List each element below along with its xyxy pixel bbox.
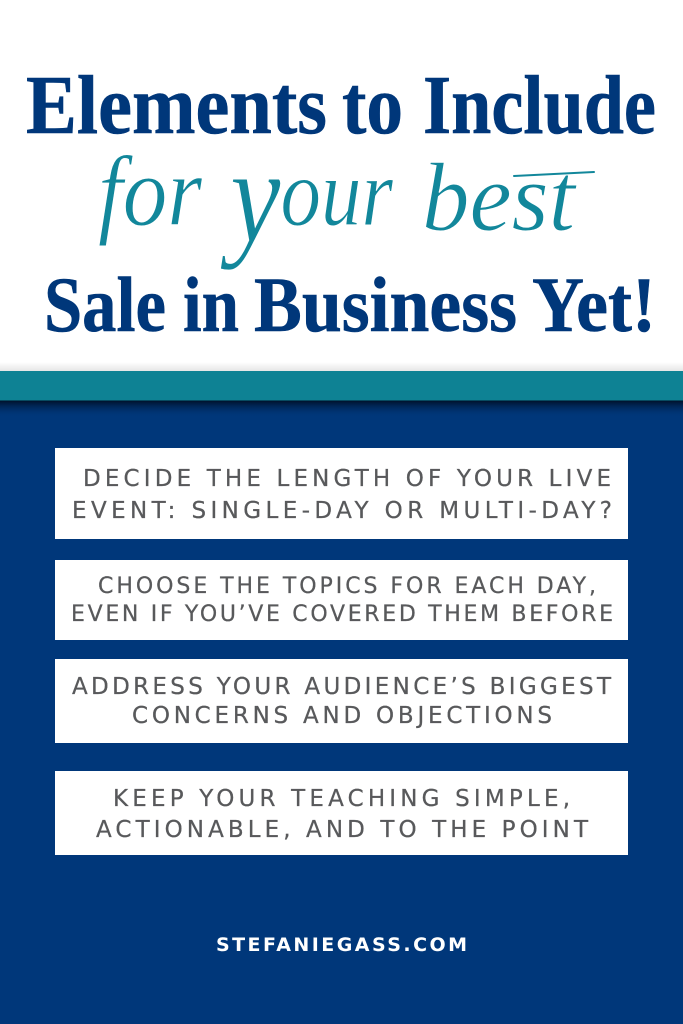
heading: script subtitle: best [422,144,578,252]
panel: white header background [0,0,683,372]
heading: first title line: to [342,59,403,152]
panel: item 4 [55,771,628,855]
heading: last title line: in [183,261,239,348]
panel: item 3 [55,659,628,743]
heading: first title line [26,59,656,152]
panel: item 2 [55,560,628,640]
heading: last title line [44,261,656,348]
panel: item 1 [55,448,628,539]
panel: item 1: EVENT: SINGLE-DAY OR MULTI-DAY? [72,498,612,524]
heading: script subtitle: our [281,139,394,246]
heading: first title line: Elements [26,59,327,152]
footer website: STEFANIEGASS.COM [216,934,467,956]
heading: script subtitle [98,122,594,271]
panel: item 3: ADDRESS YOUR AUDIENCE’S BIGGEST [72,674,612,700]
heading: script subtitle: y [220,122,281,271]
heading: script subtitle: for [98,136,203,247]
panel: item 4: KEEP YOUR TEACHING SIMPLE, [113,786,570,812]
heading: last title line: Sale [44,261,166,348]
panel: navy background [0,400,683,1024]
teal divider band [0,362,683,418]
panel: item 2: EVEN IF YOU’VE COVERED THEM BEFORE [71,602,613,627]
heading: last title line: Business [254,261,517,348]
panel: item 1: DECIDE THE LENGTH OF YOUR LIVE [83,466,611,492]
heading: last title line: Yet! [532,261,656,348]
panel: item 2: CHOOSE THE TOPICS FOR EACH DAY, [98,574,596,599]
panel: item 3: CONCERNS AND OBJECTIONS [132,703,552,729]
panel: item 4: ACTIONABLE, AND TO THE POINT [96,817,589,843]
